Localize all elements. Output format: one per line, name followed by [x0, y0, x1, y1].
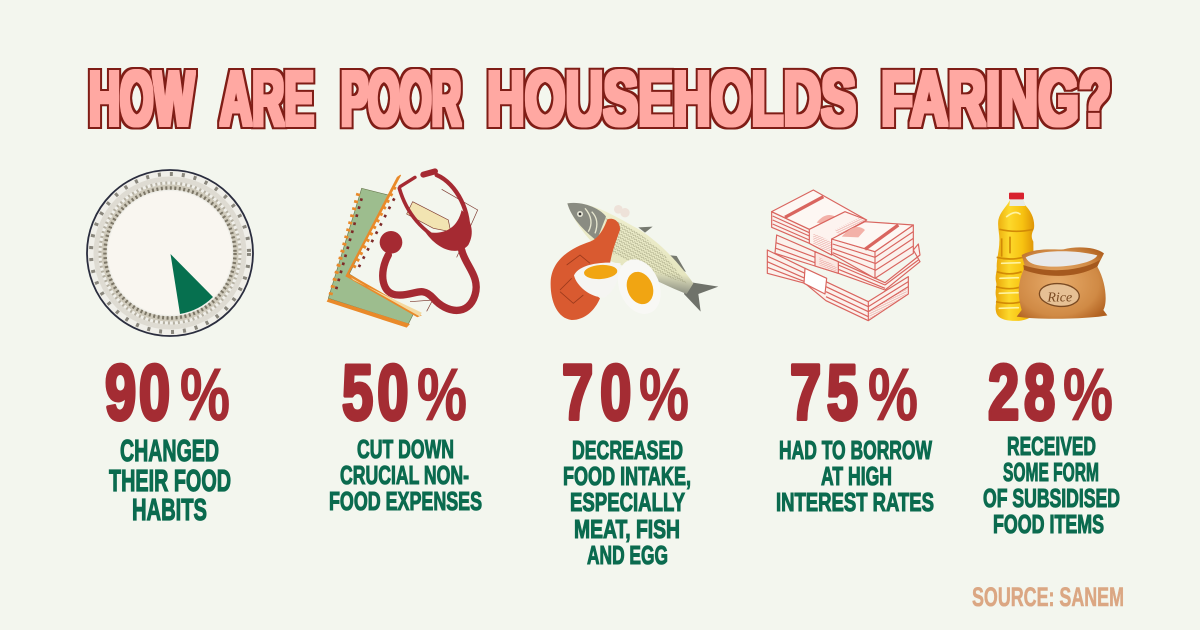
icon: oil bottle and rice sack	[996, 193, 1107, 321]
stat: 70% decreased food intake: MEAT, FISH	[574, 514, 680, 544]
source note: SOURCE: SANEM	[972, 582, 1124, 612]
stat: 70% decreased food intake: ESPECIALLY	[570, 487, 685, 517]
stat: 28% received subsidised food: %	[1063, 353, 1113, 436]
stat: 50% cut non-food expenses: CUT DOWN	[357, 434, 454, 464]
title: HOUSEHOLDS	[487, 56, 856, 142]
stat: 70% decreased food intake: DECREASED	[572, 435, 683, 465]
stat: 90% changed food habits: %	[180, 353, 230, 436]
sack	[1017, 247, 1107, 319]
cream card	[407, 202, 451, 232]
stat: 70% decreased food intake: 70	[562, 349, 631, 436]
egg halves	[574, 263, 621, 297]
stat: 28% received subsidised food: OF SUBSIDISED	[983, 483, 1120, 513]
stat: 28% received subsidised food: RECEIVED	[1007, 431, 1096, 461]
stat: 75% borrowed at high interest: AT HIGH	[821, 461, 892, 491]
front notebook edge	[346, 175, 421, 317]
stat: 28% received subsidised food	[983, 349, 1120, 539]
icon: plate with 90% wedge	[87, 170, 253, 336]
stat: 50% cut non-food expenses: %	[417, 353, 467, 436]
stat: 50% cut non-food expenses	[329, 349, 482, 516]
back notebook	[328, 188, 413, 324]
title	[89, 56, 1111, 142]
fish body	[567, 203, 693, 294]
chicken bone	[614, 205, 623, 214]
stat: 75% borrowed at high interest	[776, 349, 934, 517]
stat: 90% changed food habits: 90	[105, 349, 170, 436]
stat: 70% decreased food intake: FOOD INTAKE,	[563, 461, 691, 491]
paper outlines	[442, 189, 478, 257]
stat: 75% borrowed at high interest: %	[868, 353, 918, 436]
stat: 28% received subsidised food: SOME FORM	[1003, 457, 1099, 487]
spiral bindings	[330, 193, 358, 297]
stat: 70% decreased food intake	[562, 349, 691, 570]
fish fins	[638, 227, 653, 233]
stat: 50% cut non-food expenses: FOOD EXPENSES	[329, 486, 482, 516]
icon: fish, chicken and eggs	[551, 203, 718, 320]
bottle	[996, 200, 1034, 321]
stat: 75% borrowed at high interest: HAD TO BORROW	[779, 435, 932, 465]
stat: 50% cut non-food expenses: CRUCIAL NON-	[340, 460, 469, 490]
icon: oil bottle and rice sack: Rice	[1046, 291, 1072, 306]
top left stack	[772, 212, 832, 255]
title: ARE	[220, 56, 314, 142]
stat: 50% cut non-food expenses: 50	[342, 349, 409, 436]
stat: 90% changed food habits: CHANGED	[120, 433, 219, 468]
stethoscope	[383, 171, 476, 310]
stat: 90% changed food habits: HABITS	[132, 492, 207, 527]
stat: 28% received subsidised food: FOOD ITEMS	[993, 509, 1104, 539]
stat: 70% decreased food intake: %	[639, 353, 689, 436]
icon: notebooks and stethoscope	[327, 171, 478, 328]
lower block	[767, 250, 908, 321]
stat: 90% changed food habits	[105, 349, 231, 527]
middle block	[775, 235, 920, 290]
fish tail	[684, 282, 718, 312]
stat: 70% decreased food intake: AND EGG	[587, 540, 668, 570]
title: HOW	[89, 56, 194, 142]
icon: stacks of banknotes	[767, 190, 920, 321]
chicken leg	[551, 219, 620, 320]
stat: 28% received subsidised food: 28	[988, 349, 1055, 436]
top right stack	[832, 225, 913, 278]
stat: 75% borrowed at high interest: 75	[790, 349, 858, 436]
title: POOR	[341, 56, 461, 142]
stat: 75% borrowed at high interest: INTEREST RATES	[776, 487, 934, 517]
stat: 90% changed food habits: THEIR FOOD	[109, 463, 231, 498]
